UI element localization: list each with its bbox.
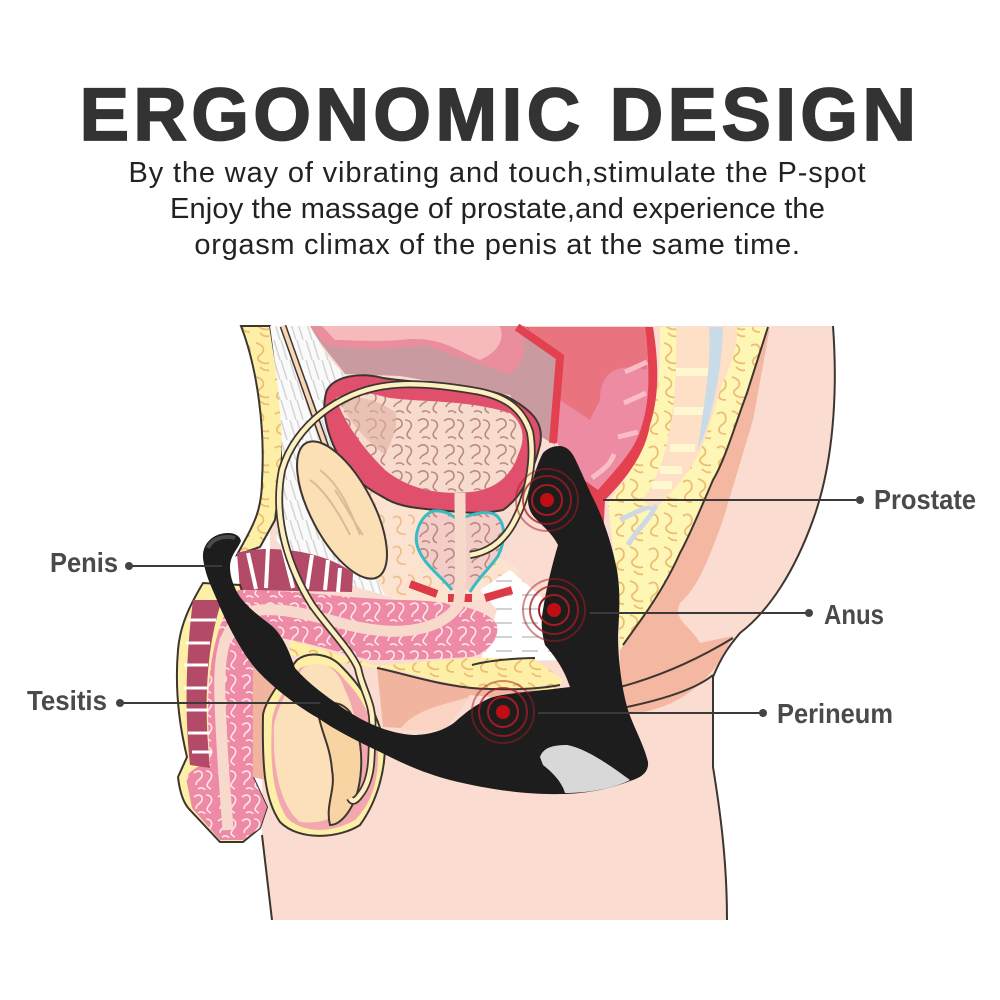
urethra red segments <box>410 584 512 598</box>
fibres behind pubic bone <box>270 326 400 600</box>
abdomen organs <box>310 326 560 445</box>
tan tissue under bladder <box>338 455 520 605</box>
callout: perineum <box>538 698 893 729</box>
spine <box>620 327 737 545</box>
spermatic cord <box>279 384 532 801</box>
back fat layer <box>608 327 768 650</box>
subtitle text <box>128 157 866 261</box>
callout: testis <box>27 685 320 716</box>
callout: anus <box>590 599 884 630</box>
abdominal wall salmon <box>377 668 567 730</box>
vibration: anus <box>523 579 585 641</box>
subtitle text: orgasm climax of the penis at the same time. <box>194 229 801 261</box>
callout: prostate <box>603 484 976 515</box>
pelvic floor tissue <box>480 570 560 662</box>
lower fat strip <box>290 640 563 690</box>
salmon gap beside scrotum <box>253 663 300 780</box>
bladder <box>324 375 541 513</box>
fascia strip <box>283 326 350 500</box>
vibration: perineum <box>472 681 534 743</box>
device highlight <box>208 537 235 548</box>
penis outer <box>177 583 267 842</box>
callout: testis: Tesitis <box>27 685 107 716</box>
scrotum and testis <box>263 655 385 836</box>
callout: prostate: Prostate <box>874 484 976 515</box>
penis crown stripes <box>237 548 353 592</box>
subtitle text: By the way of vibrating and touch,stimulate the P-spot <box>128 157 866 189</box>
front fat layer <box>237 326 283 555</box>
callout: penis <box>50 547 222 578</box>
body silhouette <box>262 326 835 920</box>
prostate <box>416 511 504 592</box>
subtitle text: Enjoy the massage of prostate,and experience the <box>170 193 825 225</box>
pubic bone <box>279 428 405 592</box>
title: ERGONOMIC DESIGN <box>80 73 920 156</box>
rectum <box>517 327 657 540</box>
device <box>203 446 648 794</box>
callout: perineum: Perineum <box>777 698 893 729</box>
buttock band and skin creases <box>262 326 835 920</box>
device button <box>540 745 630 793</box>
penis spongy body <box>184 590 497 840</box>
callout: anus: Anus <box>824 599 884 630</box>
callout: penis: Penis <box>50 547 118 578</box>
vibration: prostate <box>516 469 578 531</box>
urethra <box>220 493 460 830</box>
